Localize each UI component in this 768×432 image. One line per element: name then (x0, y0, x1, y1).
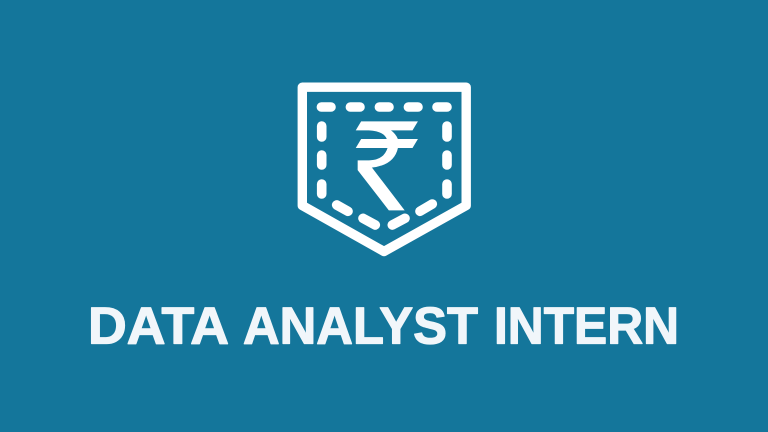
title: INTERN (494, 298, 679, 356)
icon: pocket stitching (321, 107, 447, 225)
title (88, 298, 679, 356)
icon: pocket with rupee (302, 87, 466, 252)
title: ANALYST (243, 298, 478, 356)
icon: pocket outline (302, 87, 466, 252)
title: DATA (88, 298, 229, 356)
icon: rupee symbol (356, 122, 417, 210)
